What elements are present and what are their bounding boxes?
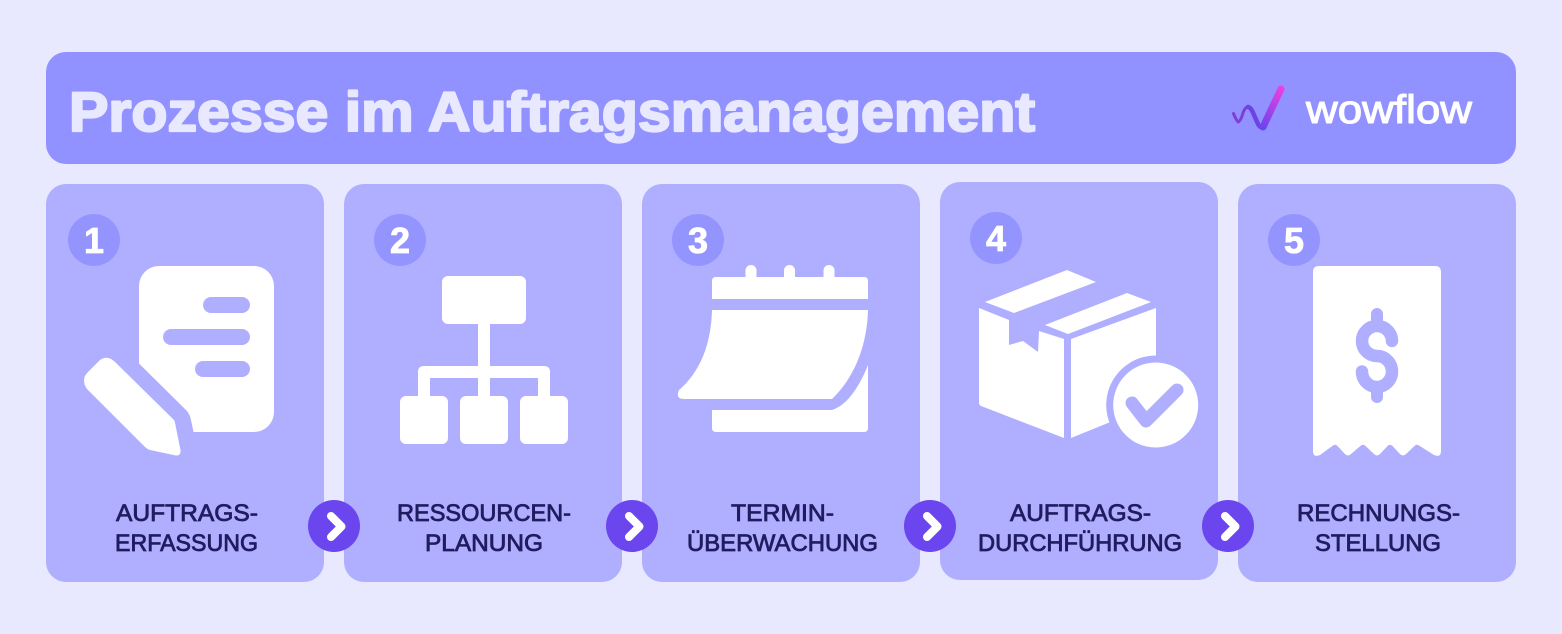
- header banner: [46, 52, 1516, 164]
- arrow: step 2 to 3: [606, 500, 658, 552]
- icon: org chart: [400, 276, 568, 444]
- arrow: step 3 to 4: [904, 500, 956, 552]
- panel: step 3 Terminüberwachung: [642, 184, 920, 582]
- label: ERFASSUNG: [115, 530, 258, 557]
- label: TERMIN-: [731, 500, 834, 527]
- label: [687, 500, 878, 557]
- label: [1297, 500, 1460, 557]
- step number 1: [68, 214, 120, 266]
- label: AUFTRAGS-: [1010, 500, 1151, 527]
- arrow: step 1 to 2: [308, 500, 360, 552]
- icon: document with pencil: [84, 266, 274, 456]
- panel: step 4 Auftragsdurchführung: [940, 182, 1218, 580]
- label: ÜBERWACHUNG: [687, 530, 878, 557]
- logo: wowflow: [1234, 88, 1472, 132]
- step number 5: 5: [1284, 220, 1304, 261]
- label: RESSOURCEN-: [397, 500, 571, 527]
- arrow: step 4 to 5: [1202, 500, 1254, 552]
- label: [397, 500, 571, 557]
- label: [978, 500, 1182, 557]
- icon: receipt with dollar sign: [1313, 266, 1441, 456]
- title: Prozesse im Auftragsmanagement: [69, 80, 1035, 143]
- label: [115, 500, 258, 557]
- label: RECHNUNGS-: [1297, 500, 1460, 527]
- label: DURCHFÜHRUNG: [978, 530, 1182, 557]
- label: AUFTRAGS-: [116, 500, 258, 527]
- step number 5: [1268, 214, 1320, 266]
- step number 3: [672, 214, 724, 266]
- panel: step 5 Rechnungsstellung: [1238, 184, 1516, 582]
- step number 1: 1: [84, 220, 104, 261]
- icon: calendar: [678, 265, 868, 432]
- step number 2: [374, 214, 426, 266]
- step number 4: [970, 212, 1022, 264]
- panel: step 2 Ressourcenplanung: [344, 184, 622, 582]
- step number 3: 3: [688, 220, 708, 261]
- logo: wowflow: wowflow: [1305, 88, 1472, 132]
- step number 4: 4: [986, 218, 1006, 259]
- label: STELLUNG: [1315, 530, 1441, 557]
- label: PLANUNG: [425, 530, 543, 557]
- step number 2: 2: [390, 220, 410, 261]
- icon: parcel with check: [979, 270, 1205, 454]
- panel: step 1 Auftragserfassung: [46, 184, 324, 582]
